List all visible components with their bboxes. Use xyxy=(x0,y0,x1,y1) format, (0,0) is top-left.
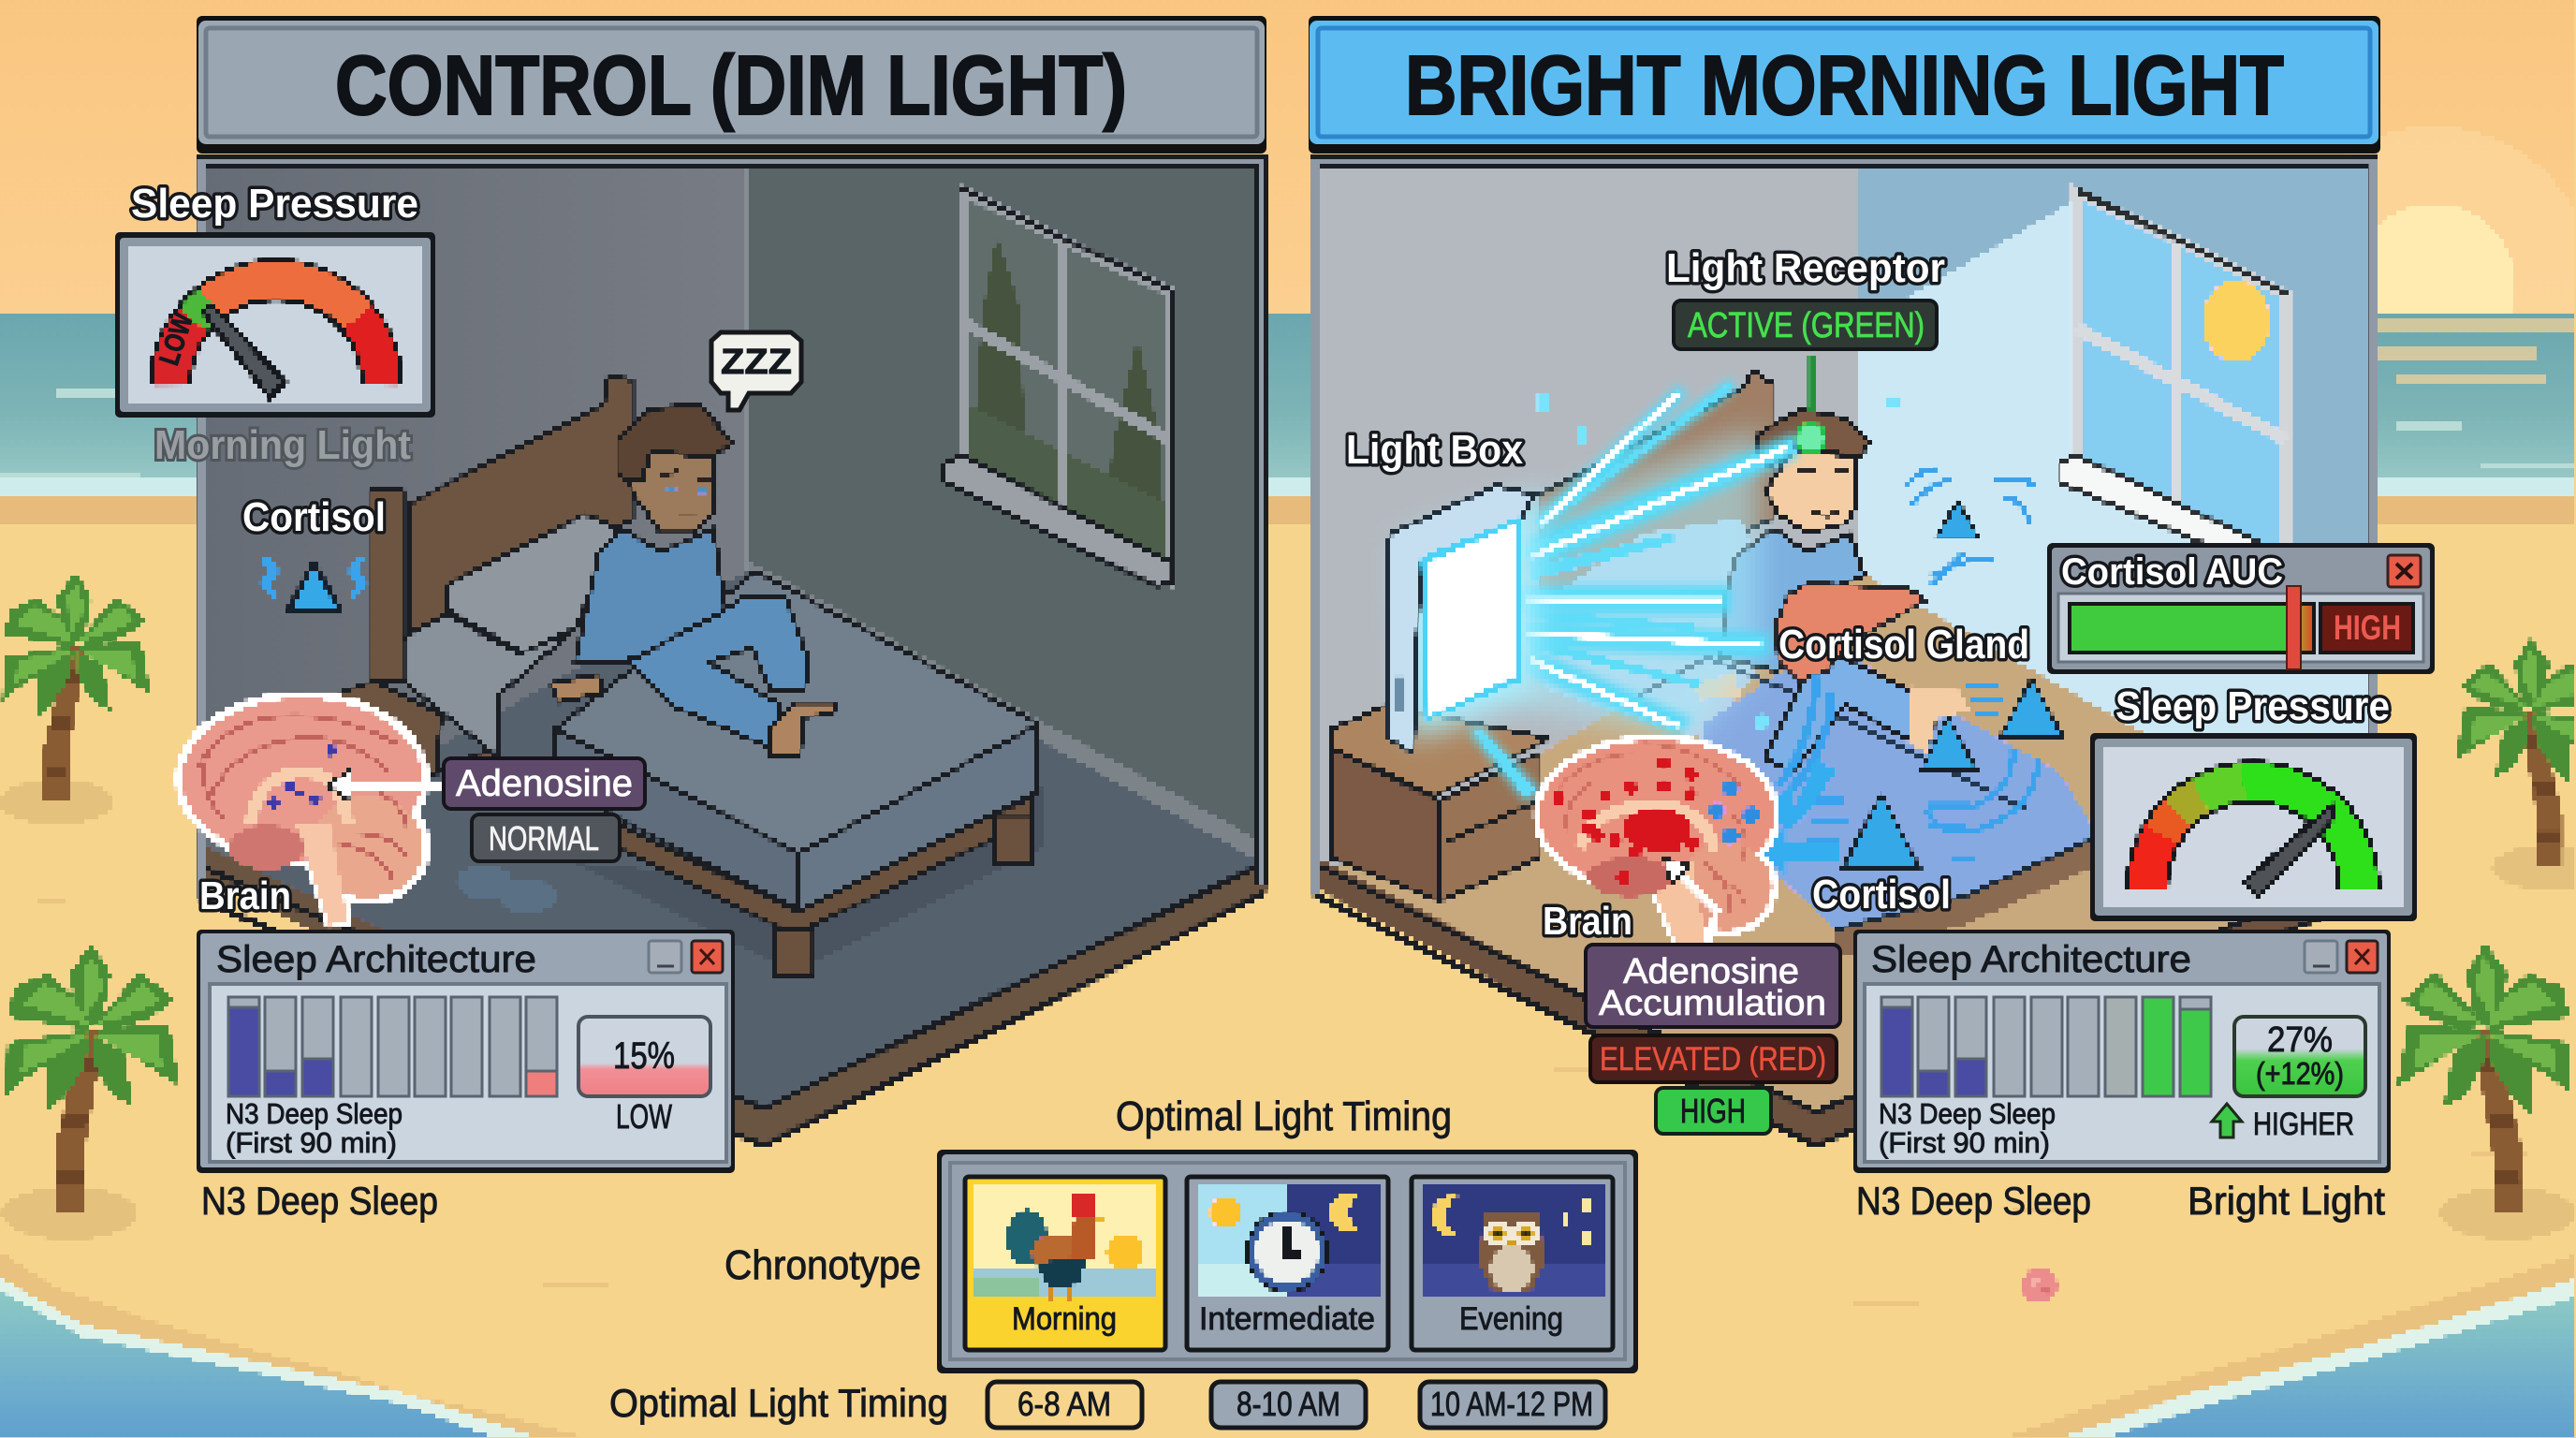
pill: 8-10 AM: 8-10 AM xyxy=(1237,1385,1340,1423)
mattress xyxy=(1702,643,2099,930)
label: N3 deep sleep left: N3 Deep Sleep xyxy=(201,1179,438,1223)
window: sleep architecture control xyxy=(197,930,735,1173)
pill: 10 AM-12 PM: 10 AM-12 PM xyxy=(1430,1385,1593,1423)
tag: high: HIGH xyxy=(1680,1092,1746,1130)
chart caption: (First 90 min) xyxy=(1879,1126,2050,1159)
title text: BRIGHT MORNING LIGHT xyxy=(1405,39,2284,133)
label: optimal light timing top: Optimal Light Timing xyxy=(1116,1093,1452,1139)
brain: control with few adenosine dots xyxy=(179,695,447,925)
chart caption xyxy=(226,1097,402,1159)
mattress xyxy=(556,571,1038,910)
label: sleep pressure: Sleep Pressure xyxy=(2115,683,2390,729)
low label on arc: LOW xyxy=(154,309,199,369)
nightstand xyxy=(317,682,494,805)
label: cortisol: Cortisol xyxy=(1812,872,1951,917)
label: faded morning light: Morning Light xyxy=(154,422,411,468)
cortisol flow swirls xyxy=(1774,469,2037,858)
label: bright light: Bright Light xyxy=(2188,1179,2385,1223)
panel: control room xyxy=(197,161,1266,1146)
pajama body xyxy=(575,528,809,748)
light rays glow xyxy=(1471,378,1797,800)
headboard xyxy=(1540,371,1774,619)
hands xyxy=(1692,674,1969,753)
room walls xyxy=(1322,166,2368,887)
head xyxy=(1757,409,1869,533)
bar chart: N3 sleep cycles xyxy=(1881,997,2211,1096)
title: Sleep Architecture xyxy=(216,939,536,980)
title text: CONTROL (DIM LIGHT) xyxy=(335,39,1127,133)
brain with adenosine build-up xyxy=(1537,739,1776,948)
label: cortisol: Cortisol xyxy=(242,494,386,540)
sunny window xyxy=(2059,190,2288,580)
card: intermediate: Intermediate xyxy=(1199,1301,1375,1337)
bar chart: N3 sleep cycles xyxy=(228,997,557,1096)
tag: high xyxy=(1656,1088,1771,1134)
cortisol gland organ xyxy=(1776,583,1926,682)
panel: bright light room xyxy=(1310,161,2378,1146)
window: cortisol AUC xyxy=(2047,543,2435,674)
icon: palm tree lower right xyxy=(2397,944,2575,1240)
label: brain: Brain xyxy=(199,873,291,917)
floating light sparkles xyxy=(1537,394,1902,729)
cortisol triangles xyxy=(1843,501,2063,868)
gauge: high sleep pressure xyxy=(2090,733,2417,921)
label: light receptor: Light Receptor xyxy=(1666,245,1945,291)
brain silhouette xyxy=(179,695,427,925)
nightstand xyxy=(1332,705,1549,901)
value box: 15%: 15% xyxy=(613,1035,675,1077)
label: optimal light timing bottom: Optimal Light Timing xyxy=(609,1381,948,1425)
card: morning: Morning xyxy=(1012,1301,1117,1337)
minimise button xyxy=(649,941,681,973)
window: sleep architecture bright xyxy=(1853,930,2391,1173)
icon: small cortisol triangle xyxy=(264,558,363,612)
tag: adenosine accumulation: Accumulation xyxy=(1599,984,1826,1023)
sheet and pillow xyxy=(1511,519,1788,739)
icon: palm tree lower left xyxy=(2,944,180,1240)
owl art xyxy=(1421,1186,1603,1299)
smiling face details xyxy=(1797,470,1851,516)
level bar xyxy=(2070,604,2314,653)
adenosine red dots xyxy=(1552,756,1699,885)
sheet and pillow xyxy=(403,514,618,757)
tag: normal xyxy=(472,814,620,861)
icon: palm tree upper right xyxy=(2455,638,2576,889)
icon: green up arrow xyxy=(2212,1104,2242,1137)
value box: 27%: (+12%) xyxy=(2256,1056,2344,1091)
chart caption: (First 90 min) xyxy=(226,1126,397,1159)
brain silhouette xyxy=(1537,739,1776,948)
bed and seated dim-light person xyxy=(317,375,1043,975)
value box: 27% xyxy=(2234,1017,2365,1096)
header: bright morning light xyxy=(1309,16,2380,154)
slippers xyxy=(457,864,556,914)
bed frame and legs xyxy=(618,796,1033,975)
brain folds xyxy=(197,715,407,880)
value box: 27%: 27% xyxy=(2267,1020,2333,1060)
label: sleep pressure: Sleep Pressure xyxy=(131,181,418,227)
status: high xyxy=(2320,604,2413,653)
room floor xyxy=(197,560,1266,1146)
light receptor node xyxy=(1796,424,1825,453)
arrow from tag xyxy=(1671,865,1717,946)
pill: 10 AM-12 PM xyxy=(1420,1382,1605,1428)
card: intermediate xyxy=(1187,1177,1388,1350)
status: high: HIGH xyxy=(2334,609,2401,647)
clock art xyxy=(1196,1186,1379,1299)
brain folds xyxy=(1554,743,1746,916)
pill: 6-8 AM: 6-8 AM xyxy=(1017,1385,1111,1423)
icon: seashell on sand xyxy=(2022,1268,2057,1303)
speech bubble: ZZZ xyxy=(711,332,801,410)
light wash xyxy=(1520,428,1760,739)
light rays xyxy=(1475,383,1795,799)
rooster art xyxy=(973,1186,1155,1299)
person body xyxy=(1721,528,1940,771)
tag: adenosine accumulation xyxy=(1586,945,1840,1027)
tired face details xyxy=(661,471,712,515)
close button xyxy=(2388,555,2421,587)
receptor line xyxy=(1806,357,1819,414)
label: light box: Light Box xyxy=(1346,427,1523,473)
chart caption xyxy=(1879,1097,2056,1159)
panel: chronotype cards xyxy=(937,1150,1638,1373)
speech bubble: ZZZ: ZZZ xyxy=(721,343,792,382)
label: cortisol gland: Cortisol Gland xyxy=(1778,622,2029,668)
arrow xyxy=(327,770,447,801)
label: N3 deep sleep right: N3 Deep Sleep xyxy=(1856,1179,2091,1223)
light box glow xyxy=(1401,495,1535,739)
blue arrows to brain xyxy=(1754,757,1840,874)
label: brain: Brain xyxy=(1543,899,1632,943)
gauge arc and needle xyxy=(2147,782,2359,897)
room walls xyxy=(208,166,1254,887)
bed shadow xyxy=(575,786,1043,973)
room frame xyxy=(1315,161,2374,894)
level marker xyxy=(2287,586,2301,669)
pill: 8-10 AM xyxy=(1211,1382,1366,1428)
headboard xyxy=(370,375,633,682)
title: Cortisol AUC xyxy=(2061,551,2283,593)
gauge arc xyxy=(170,279,382,397)
adenosine dots xyxy=(268,745,337,809)
header: control xyxy=(197,16,1266,154)
tag: active green xyxy=(1674,301,1937,349)
icons: palm trees xyxy=(0,573,2576,1303)
window with dark pine trees xyxy=(944,188,1174,586)
label: chronotype: Chronotype xyxy=(724,1242,921,1288)
chart caption: N3 Deep Sleep xyxy=(1879,1097,2056,1130)
status: low: LOW xyxy=(616,1097,672,1136)
room floor xyxy=(1310,571,2378,1146)
chart caption: N3 Deep Sleep xyxy=(226,1097,402,1130)
tag: adenosine accumulation: Adenosine xyxy=(1623,952,1799,991)
status: higher: HIGHER xyxy=(2253,1107,2354,1142)
card: evening: Evening xyxy=(1459,1301,1563,1337)
head xyxy=(618,404,733,533)
icon: palm tree upper left xyxy=(0,573,151,824)
gauge: low sleep pressure xyxy=(115,232,435,418)
blue cortisol drops xyxy=(1710,781,1759,845)
close button xyxy=(2347,941,2378,973)
value box: 15% xyxy=(578,1017,710,1096)
pill: 6-8 AM xyxy=(988,1382,1142,1428)
tag: active green: ACTIVE (GREEN) xyxy=(1688,306,1925,345)
bed, person, light box and cortisol art xyxy=(1332,357,2099,958)
tag: adenosine: Adenosine xyxy=(456,763,633,804)
card: evening xyxy=(1412,1177,1613,1350)
minimise button xyxy=(2305,941,2337,973)
title: Sleep Architecture xyxy=(1871,939,2191,980)
hand and feet xyxy=(551,674,838,757)
room frame xyxy=(202,161,1261,899)
light box xyxy=(1387,485,1535,753)
close button xyxy=(692,941,723,973)
tag: normal: NORMAL xyxy=(489,819,599,858)
card: morning xyxy=(965,1177,1165,1350)
tag: elevated red xyxy=(1590,1035,1837,1082)
tag: elevated red: ELEVATED (RED) xyxy=(1600,1041,1826,1078)
